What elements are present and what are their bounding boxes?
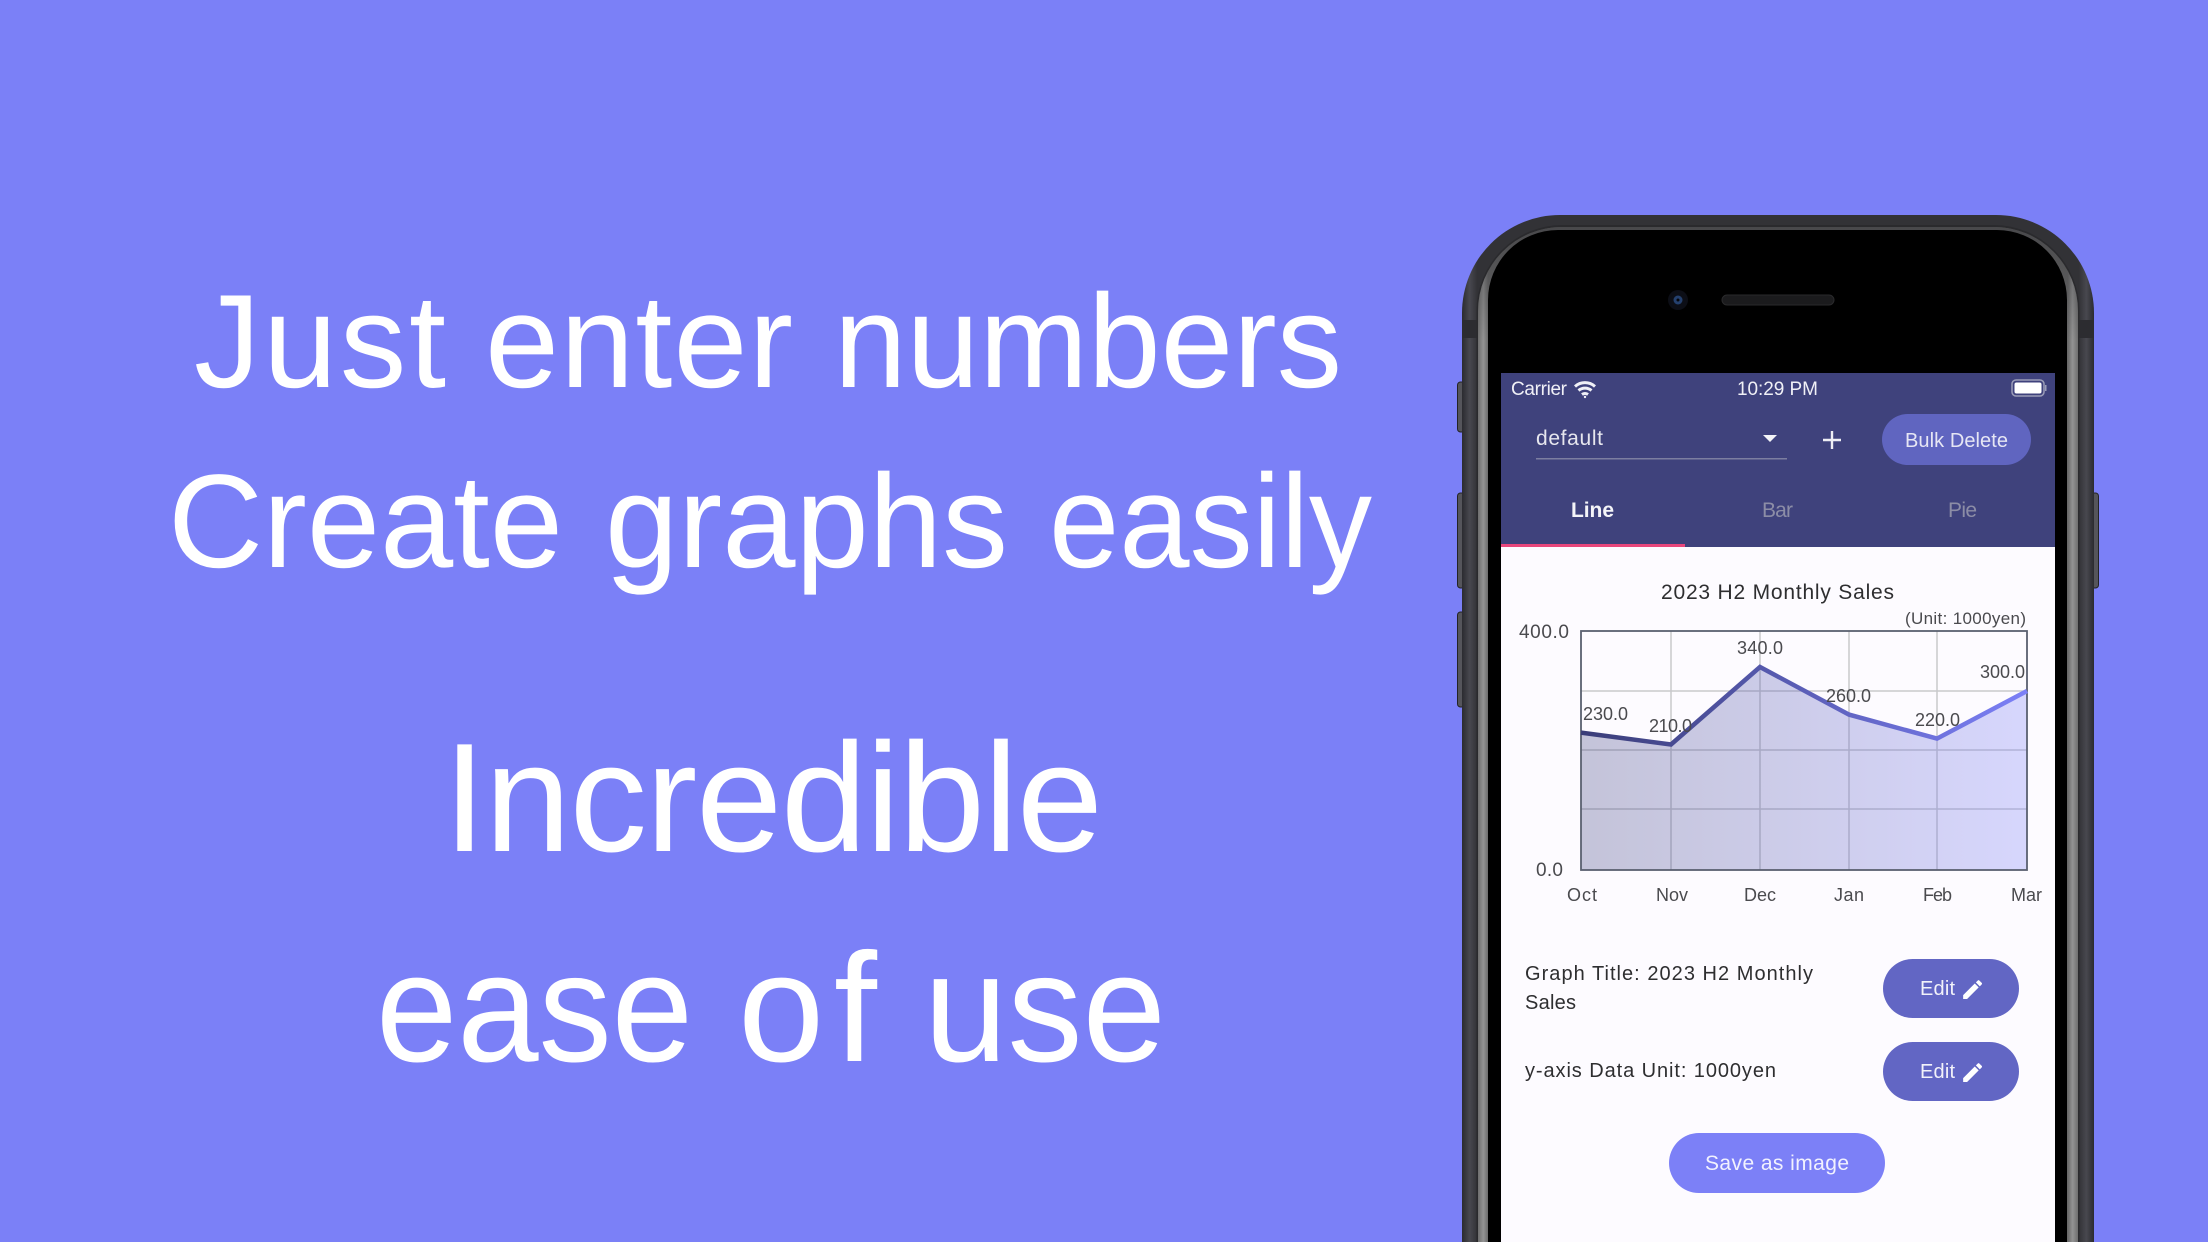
- x axis labels: Oct: [1567, 885, 1597, 905]
- button: edit unit: [1883, 1042, 2019, 1101]
- x axis labels: Feb: [1923, 885, 1952, 905]
- tabs: Pie: [1948, 499, 1977, 522]
- headline: ease of use: ease: [376, 921, 693, 1094]
- data labels: 340.0: [1737, 638, 1783, 658]
- y axis labels: [1519, 622, 1569, 881]
- button: edit unit: Edit: [1920, 1061, 1955, 1083]
- data labels: 300.0: [1980, 662, 2025, 682]
- headline: ease of use: use: [924, 921, 1166, 1094]
- front camera: [1668, 290, 1688, 310]
- button: bulk delete: Bulk Delete: [1905, 430, 2008, 452]
- tabs: Line: [1571, 499, 1614, 522]
- headline: create graphs: [168, 268, 1372, 596]
- headline: create graphs: Just: [194, 268, 446, 416]
- headline: create graphs: numbers: [834, 268, 1342, 416]
- x axis labels: Dec: [1744, 885, 1776, 905]
- headline: create graphs: Create: [168, 448, 563, 596]
- data labels: 260.0: [1826, 686, 1871, 706]
- icon: pencil: [1963, 1063, 1982, 1082]
- icon: plus: [1823, 431, 1841, 449]
- data labels: 230.0: [1583, 704, 1628, 724]
- headline: ease of use: [376, 711, 1166, 1094]
- grid: [1581, 631, 2027, 870]
- data labels: 220.0: [1915, 710, 1960, 730]
- graph selector dropdown: default: [1536, 427, 1603, 450]
- side buttons: [1458, 382, 2098, 707]
- button: edit title: [1883, 959, 2019, 1018]
- x axis labels: Nov: [1656, 885, 1688, 905]
- x axis labels: [1567, 885, 2042, 905]
- area fill: [1581, 667, 2027, 870]
- icon: wifi: [1575, 383, 1595, 398]
- x axis labels: Jan: [1834, 885, 1864, 905]
- phone frame: [1462, 215, 2094, 1242]
- graph selector dropdown: [1536, 427, 1787, 460]
- icon: battery: [2012, 380, 2046, 396]
- app screen: [1501, 373, 2055, 1242]
- screen background: [1501, 547, 2055, 1242]
- speaker: [1722, 295, 1834, 305]
- graph title setting: Graph Title: 2023 H2 Monthly: [1525, 963, 1813, 985]
- button: save as image: Save as image: [1705, 1152, 1849, 1175]
- y axis labels: 400.0: [1519, 622, 1569, 643]
- chart unit: (Unit: 1000yen): [1905, 609, 2026, 628]
- line chart: [1519, 622, 2042, 905]
- headline: create graphs: graphs: [605, 448, 1008, 596]
- headline: create graphs: easily: [1049, 448, 1372, 596]
- button: bulk delete: [1882, 414, 2031, 465]
- headline: create graphs: enter: [485, 268, 793, 416]
- status bar: 10:29 PM: [1737, 379, 1818, 400]
- icon: pencil: [1963, 980, 1982, 999]
- tabs: Bar: [1762, 499, 1793, 522]
- data line: [1581, 667, 2027, 744]
- button: edit title: Edit: [1920, 978, 1955, 1000]
- graph title setting: [1525, 963, 1813, 1014]
- headline: ease of use: of: [738, 921, 878, 1094]
- y axis labels: 0.0: [1536, 860, 1563, 881]
- button: save as image: [1669, 1133, 1885, 1193]
- tabs: [1501, 499, 1977, 547]
- phone mockup: [1458, 215, 2098, 1242]
- chart title: 2023 H2 Monthly Sales: [1661, 581, 1894, 604]
- data labels: [1583, 638, 2025, 736]
- headline: ease of use: Incredible: [443, 711, 1103, 884]
- data labels: 210.0: [1649, 716, 1692, 736]
- app bar: [1501, 373, 2055, 547]
- graph title setting: Sales: [1525, 992, 1576, 1014]
- status bar: Carrier: [1511, 379, 1568, 400]
- plot border: [1581, 631, 2027, 870]
- status bar: [1511, 379, 2046, 400]
- x axis labels: Mar: [2011, 885, 2042, 905]
- y-axis unit setting: y-axis Data Unit: 1000yen: [1525, 1060, 1776, 1082]
